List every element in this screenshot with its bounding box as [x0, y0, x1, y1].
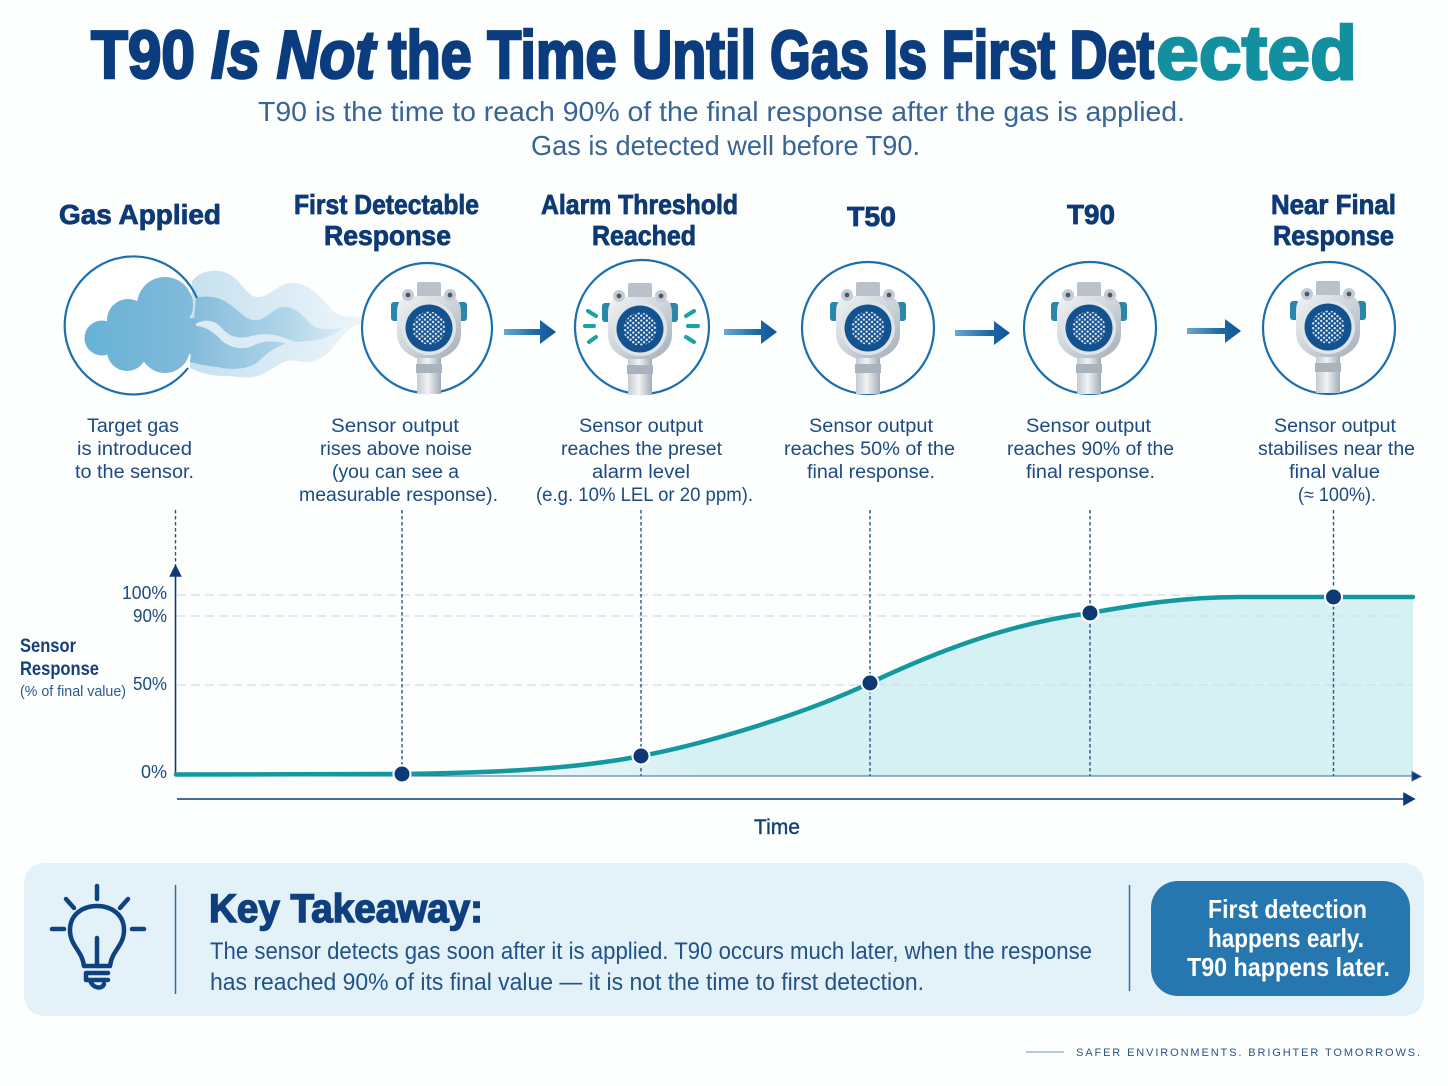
text: T50 description: final response.	[807, 462, 935, 483]
footer tagline: SAFER ENVIRONMENTS. BRIGHTER TOMORROWS.	[1076, 1047, 1420, 1059]
text: alarm threshold description: Sensor output	[579, 416, 704, 437]
heading: Alarm Threshold Reached: Reached	[592, 220, 696, 251]
text: gas applied description: to the sensor.	[75, 462, 194, 483]
text: near final description: Sensor output	[1274, 416, 1397, 437]
text: T50 description	[784, 416, 955, 483]
takeaway body	[210, 938, 1092, 996]
subtitle: Gas is detected well before T90.	[531, 130, 920, 161]
heading: First Detectable Response: Response	[324, 220, 451, 251]
heading: Gas Applied: Gas Applied	[59, 199, 221, 230]
y axis	[170, 566, 180, 775]
text: alarm threshold description: (e.g. 10% LEL or 20 ppm).	[536, 485, 753, 506]
area under curve	[402, 597, 1413, 776]
heading: Near Final Response	[1271, 189, 1396, 251]
icon: sensor with alarm indicators	[575, 260, 709, 395]
icon: light bulb	[52, 886, 144, 987]
text: alarm threshold description: alarm level	[592, 462, 690, 483]
subtitle	[258, 96, 1185, 161]
heading: Near Final Response: Response	[1273, 220, 1394, 251]
y axis label: (% of final value)	[20, 683, 126, 700]
y axis label: Response	[20, 659, 99, 680]
text: T90 description: reaches 90% of the	[1007, 439, 1174, 460]
curve	[176, 597, 1413, 774]
text: T90 description: final response.	[1026, 462, 1155, 483]
icon: sensor, near final response	[1263, 262, 1395, 394]
chart: sensor response curve	[170, 510, 1421, 804]
heading: T50: T50	[847, 201, 896, 232]
text: gas applied description: Target gas	[87, 416, 179, 437]
y tick labels: 50%	[133, 674, 167, 694]
callout	[1151, 881, 1410, 996]
time arrow	[177, 794, 1414, 804]
callout: T90 happens later.	[1187, 952, 1390, 982]
title	[91, 11, 1357, 96]
text: near final description: (≈ 100%).	[1298, 485, 1376, 506]
heading: First Detectable Response: First Detectable	[294, 189, 479, 220]
x axis	[176, 772, 1421, 781]
title: Gas Is First Det	[770, 17, 1154, 93]
arrow 3	[955, 321, 1010, 345]
text: T50 description: reaches 50% of the	[784, 439, 955, 460]
text: near final description	[1258, 416, 1415, 506]
text: near final description: final value	[1289, 462, 1380, 483]
y tick labels: 0%	[141, 762, 167, 782]
heading: First Detectable Response	[294, 189, 479, 251]
icon: sensor, T90	[1024, 262, 1156, 394]
arrow 2	[724, 320, 777, 344]
subtitle: T90 is the time to reach 90% of the final response after the gas is applied.	[258, 96, 1185, 127]
text: first detectable description: Sensor output	[331, 416, 460, 437]
text: alarm threshold description	[536, 416, 753, 506]
y axis label: Sensor	[20, 636, 77, 657]
takeaway body: has reached 90% of its final value — it is not the time to first detection.	[210, 969, 924, 996]
heading: Near Final Response: Near Final	[1271, 189, 1396, 220]
takeaway heading: Key Takeaway:	[209, 887, 483, 931]
heading: Alarm Threshold Reached	[541, 189, 738, 251]
text: first detectable description: measurable response).	[299, 485, 498, 506]
title: ected	[1156, 11, 1357, 96]
callout: First detection	[1208, 894, 1367, 924]
icon: sensor, first detectable response	[362, 263, 492, 394]
text: T90 description: Sensor output	[1026, 416, 1152, 437]
text: first detectable description: (you can see a	[332, 462, 459, 483]
text: gas applied description	[75, 416, 194, 483]
y tick labels	[122, 583, 167, 782]
title: the Time Until	[388, 17, 756, 93]
arrow 1	[504, 320, 556, 344]
data points	[394, 588, 1342, 782]
y axis label	[20, 636, 126, 700]
y tick labels: 100%	[122, 583, 167, 603]
y tick labels: 90%	[133, 606, 167, 626]
text: first detectable description: rises above noise	[320, 439, 472, 460]
heading: Alarm Threshold Reached: Alarm Threshold	[541, 189, 738, 220]
takeaway body: The sensor detects gas soon after it is applied. T90 occurs much later, when the response	[210, 938, 1092, 965]
callout: happens early.	[1208, 923, 1364, 953]
title: Is Not	[211, 17, 377, 93]
text: first detectable description	[299, 416, 498, 506]
text: gas applied description: is introduced	[77, 439, 192, 460]
x axis label: Time	[754, 816, 800, 839]
icon: gas cloud and plume	[65, 256, 364, 395]
text: alarm threshold description: reaches the preset	[561, 439, 723, 460]
text: T50 description: Sensor output	[809, 416, 934, 437]
text: T90 description	[1007, 416, 1174, 483]
heading: T90: T90	[1067, 199, 1115, 230]
title: T90	[91, 17, 195, 93]
panel: key takeaway	[24, 863, 1424, 1016]
arrow 4	[1187, 319, 1241, 343]
text: near final description: stabilises near the	[1258, 439, 1415, 460]
icon: sensor, T50	[802, 262, 934, 394]
